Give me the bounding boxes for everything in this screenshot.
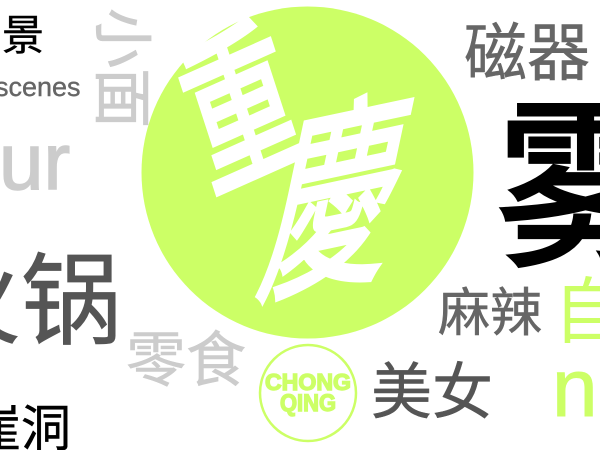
word: 景: 景	[2, 12, 44, 59]
stamp text: QING: QING	[280, 390, 336, 417]
word: 小面 rotated: 小面	[88, 8, 155, 128]
word: 磁器: 磁器	[464, 19, 590, 89]
word: 麻辣: 麻辣	[438, 285, 542, 343]
word: 美女: 美女	[371, 358, 493, 426]
calligraphy: 慶: 慶	[242, 18, 437, 340]
word: 零食: 零食	[126, 327, 246, 394]
word: ur: ur	[0, 117, 70, 206]
logo: green circle with calligraphy	[142, 0, 474, 340]
stamp text: CHONG: CHONG	[265, 369, 351, 395]
